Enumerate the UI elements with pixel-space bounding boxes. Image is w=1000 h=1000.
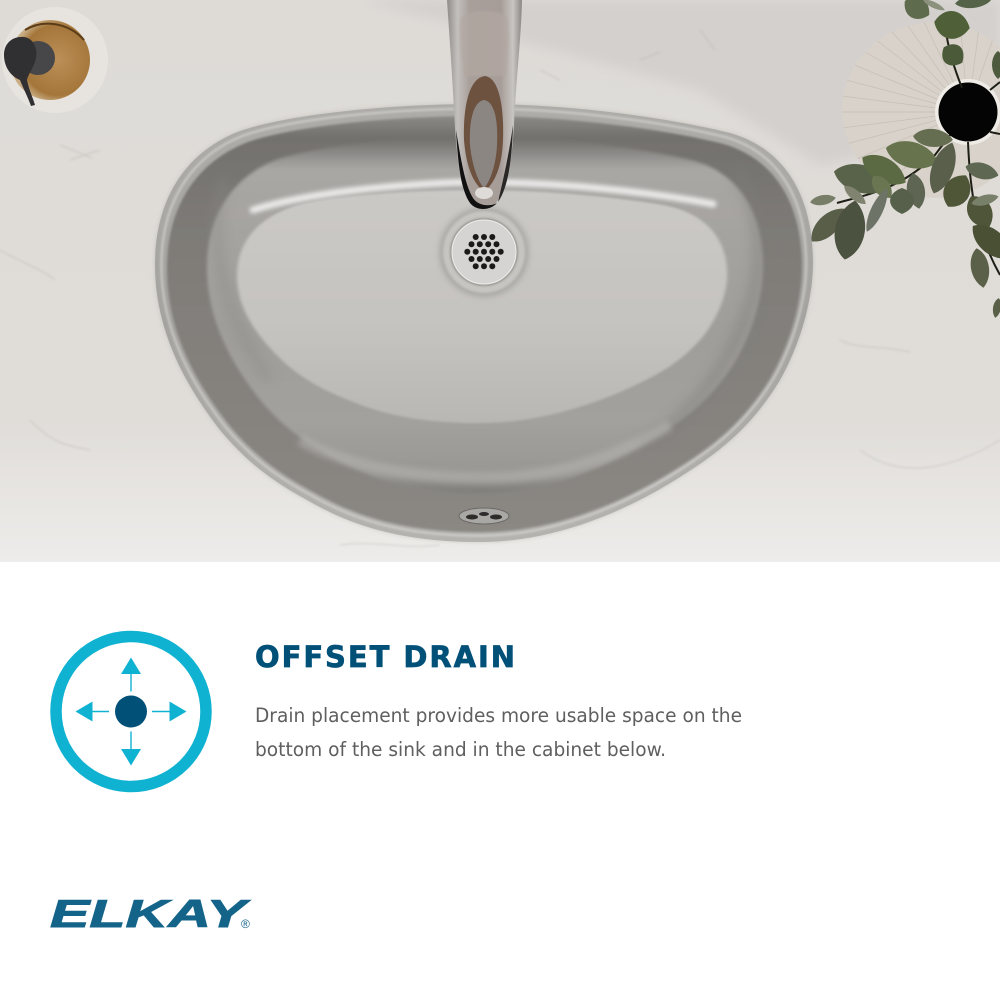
eucalyptus plant bbox=[805, 0, 1000, 319]
soap dispenser bbox=[2, 7, 108, 113]
sink basin bbox=[155, 104, 813, 542]
faucet dark edge bbox=[456, 130, 497, 209]
right wall shading bbox=[667, 197, 762, 426]
faucet bbox=[447, 0, 522, 209]
icon: offset drain with four arrows bbox=[56, 636, 206, 786]
heading: OFFSET DRAIN bbox=[255, 640, 515, 674]
lower ring highlight bbox=[300, 425, 670, 478]
sink shadow on marble bbox=[155, 104, 813, 542]
pump base bbox=[30, 41, 55, 75]
faucet upper reflection bbox=[460, 14, 508, 56]
fan center hole bbox=[935, 79, 1000, 145]
outer rim bbox=[155, 104, 813, 542]
faucet inner reflection bbox=[470, 100, 497, 188]
arrow down bbox=[121, 732, 141, 766]
body text: Drain placement provides more usable space on the bbox=[255, 704, 742, 727]
photo: sink on marble countertop bbox=[0, 0, 1000, 562]
icon center dot bbox=[115, 696, 147, 728]
main drain bbox=[439, 207, 529, 297]
rim highlight bbox=[161, 109, 806, 536]
body text: bottom of the sink and in the cabinet below. bbox=[255, 738, 666, 761]
drain plate bbox=[452, 220, 516, 284]
logo: Elkay bbox=[50, 893, 251, 936]
floor highlight bbox=[253, 182, 713, 210]
arrow up bbox=[121, 658, 141, 692]
sloped basin wall bbox=[207, 137, 763, 493]
logo: Elkay: ® bbox=[241, 917, 250, 931]
decorative fan bbox=[840, 16, 1000, 198]
glass bbox=[2, 7, 108, 113]
arrow left bbox=[76, 702, 109, 722]
overflow drain bbox=[459, 508, 509, 524]
drain holes bbox=[464, 234, 504, 269]
icon ring bbox=[56, 636, 206, 786]
marble countertop bbox=[0, 0, 1000, 562]
logo: Elkay: ELKAY bbox=[50, 893, 251, 936]
leaves bbox=[805, 0, 1000, 319]
faucet brown reflection bbox=[464, 76, 503, 192]
stems bbox=[837, 25, 1000, 275]
faucet tip highlight bbox=[475, 187, 493, 199]
left wall shading bbox=[217, 180, 270, 380]
dark channel bbox=[167, 116, 802, 532]
pump head bbox=[4, 37, 36, 106]
body text bbox=[255, 704, 742, 761]
arrow right bbox=[152, 702, 186, 722]
basin floor bbox=[237, 190, 727, 423]
